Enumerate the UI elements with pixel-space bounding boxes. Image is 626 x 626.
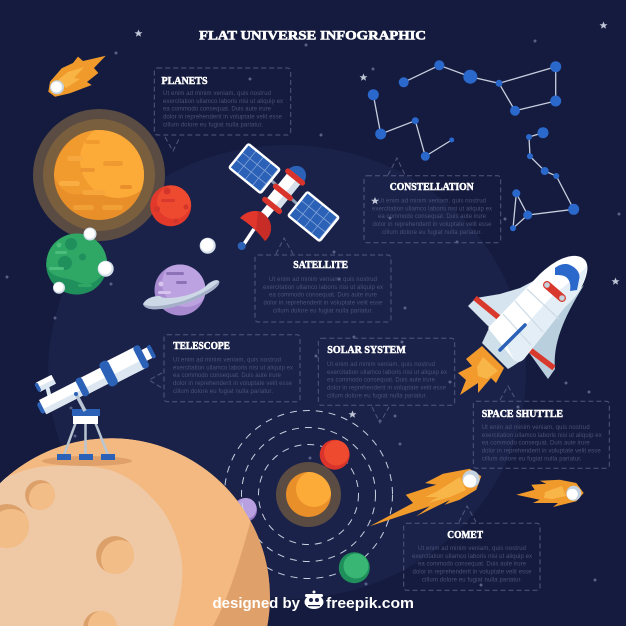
telescope feet [57,454,115,460]
icon: freepik logo [304,590,324,609]
telescope legs [64,422,108,455]
text: solar system: cillum dolore eu fugiat nulla pariatur. [327,393,427,399]
moon surface [0,438,280,626]
panel: solar system [318,338,455,423]
panel: planets [154,68,291,151]
heading: space shuttle: SPACE SHUTTLE [482,409,563,420]
heading: constellation: CONSTELLATION [390,182,474,193]
text: comet: dolor in reprehenderit in voluptate velit esse [412,570,532,576]
constellation: right [510,127,579,231]
text: satellite: Ut enim ad minim veniam, quis nostrud [269,277,377,283]
text: solar system: Ut enim ad minim veniam, quis nostrud [327,362,435,368]
shuttle flame [458,346,504,395]
text: space shuttle [482,425,602,462]
text: comet: ea commodo consequat. Duis aute irure [418,562,527,568]
text: comet: cillum dolore eu fugiat nulla pariatur. [422,577,522,583]
heading: telescope: TELESCOPE [173,341,230,352]
text: planets: Ut enim ad minim veniam, quis nostrud [163,91,271,97]
shuttle cockpit [555,264,580,291]
panel: telescope [149,335,300,402]
text: constellation: cillum dolore eu fugiat nulla pariatur. [382,230,482,236]
planet: green with moons [46,228,114,300]
text: telescope: cillum dolore eu fugiat nulla pariatur. [173,389,273,395]
text: space shuttle: exercitation ullamco laboris nisi ut aliquip ex [482,433,602,439]
text: comet: Ut enim ad minim veniam, quis nostrud [418,546,526,552]
telescope tube [33,339,159,421]
solar system [224,410,392,583]
text: solar system: ea commodo consequat. Duis aute irure [327,378,436,384]
text: satellite: exercitation ullamco laboris nisi ut aliquip ex [263,285,383,291]
satellite [227,142,341,250]
text: planets [163,91,283,128]
shuttle fuselage [488,256,587,362]
moon: white ball [200,238,216,254]
text: constellation: dolor in reprehenderit in voluptate velit esse [372,222,492,228]
text: constellation: exercitation ullamco laboris nisi ut aliquip ex [372,206,492,212]
footer: freepik credit: designed by [212,595,301,612]
text: planets: cillum dolore eu fugiat nulla pariatur. [163,122,263,128]
panel: satellite [255,238,391,322]
text: comet: exercitation ullamco laboris nisi ut aliquip ex [412,554,532,560]
text: solar system: exercitation ullamco laboris nisi ut aliquip ex [327,370,447,376]
text: satellite: dolor in reprehenderit in voluptate velit esse [264,300,383,306]
text: constellation [372,198,492,236]
text: satellite: ea commodo consequat. Duis aute irure [269,293,378,299]
planet: sun with halo [33,109,165,241]
comet: large [370,469,481,526]
telescope finder [34,375,56,398]
text: space shuttle: dolor in reprehenderit in voluptate velit esse [482,448,601,454]
heading: satellite: SATELLITE [293,260,348,271]
text: space shuttle: cillum dolore eu fugiat nulla pariatur. [482,456,582,462]
text: telescope: dolor in reprehenderit in voluptate velit esse [173,381,293,387]
panel: comet [404,506,540,590]
shuttle window stripe [500,325,525,350]
heading: planets: PLANETS [162,76,208,87]
telescope mount [72,409,100,424]
footer: freepik credit: freepik.com [326,595,414,612]
comet: top left [48,56,106,97]
comet: small [516,480,584,507]
text: constellation: Ut enim ad minim veniam, quis nostrud [378,198,486,204]
text: solar system [327,362,447,399]
space shuttle [458,256,587,395]
orbits [224,410,392,578]
text: planets: ea commodo consequat. Duis aute irure [163,107,272,113]
shuttle red hatch [544,282,565,301]
planet: purple with ring [143,259,219,316]
text: telescope: exercitation ullamco laboris nisi ut aliquip ex [173,365,293,371]
planet: red [150,185,191,226]
constellation: zigzag [368,89,454,161]
shuttle left wing [468,275,545,340]
text: satellite: cillum dolore eu fugiat nulla pariatur. [273,308,373,314]
central sun [276,462,341,527]
text: telescope [173,358,293,395]
telescope [33,339,159,466]
constellation: dipper [399,60,561,116]
text: space shuttle: ea commodo consequat. Duis aute irure [482,441,590,447]
telescope arm [74,392,85,411]
footer: freepik credit [212,590,414,612]
telescope shadow [42,456,132,466]
text: space shuttle: Ut enim ad minim veniam, quis nostrud [482,425,590,431]
red orbiting planet [320,440,350,470]
heading: solar system: SOLAR SYSTEM [327,345,406,356]
panel: space shuttle [473,386,609,468]
heading: comet: COMET [447,530,483,541]
panel: constellation [364,158,501,243]
text: comet [412,546,532,583]
text: solar system: dolor in reprehenderit in voluptate velit esse [327,386,447,392]
purple planet [233,498,257,522]
shuttle nozzle [482,326,522,369]
text: satellite [263,277,383,314]
text: planets: dolor in reprehenderit in voluptate velit esse [163,114,283,120]
title: FLAT UNIVERSE INFOGRAPHIC [199,28,426,42]
shuttle right wing [520,285,584,379]
text: telescope: Ut enim ad minim veniam, quis nostrud [173,358,281,364]
text: telescope: ea commodo consequat. Duis aute irure [173,373,282,379]
text: constellation: ea commodo consequat. Duis aute irure [378,214,487,220]
green orbiting planet [339,552,370,583]
text: planets: exercitation ullamco laboris nisi ut aliquip ex [163,99,283,105]
